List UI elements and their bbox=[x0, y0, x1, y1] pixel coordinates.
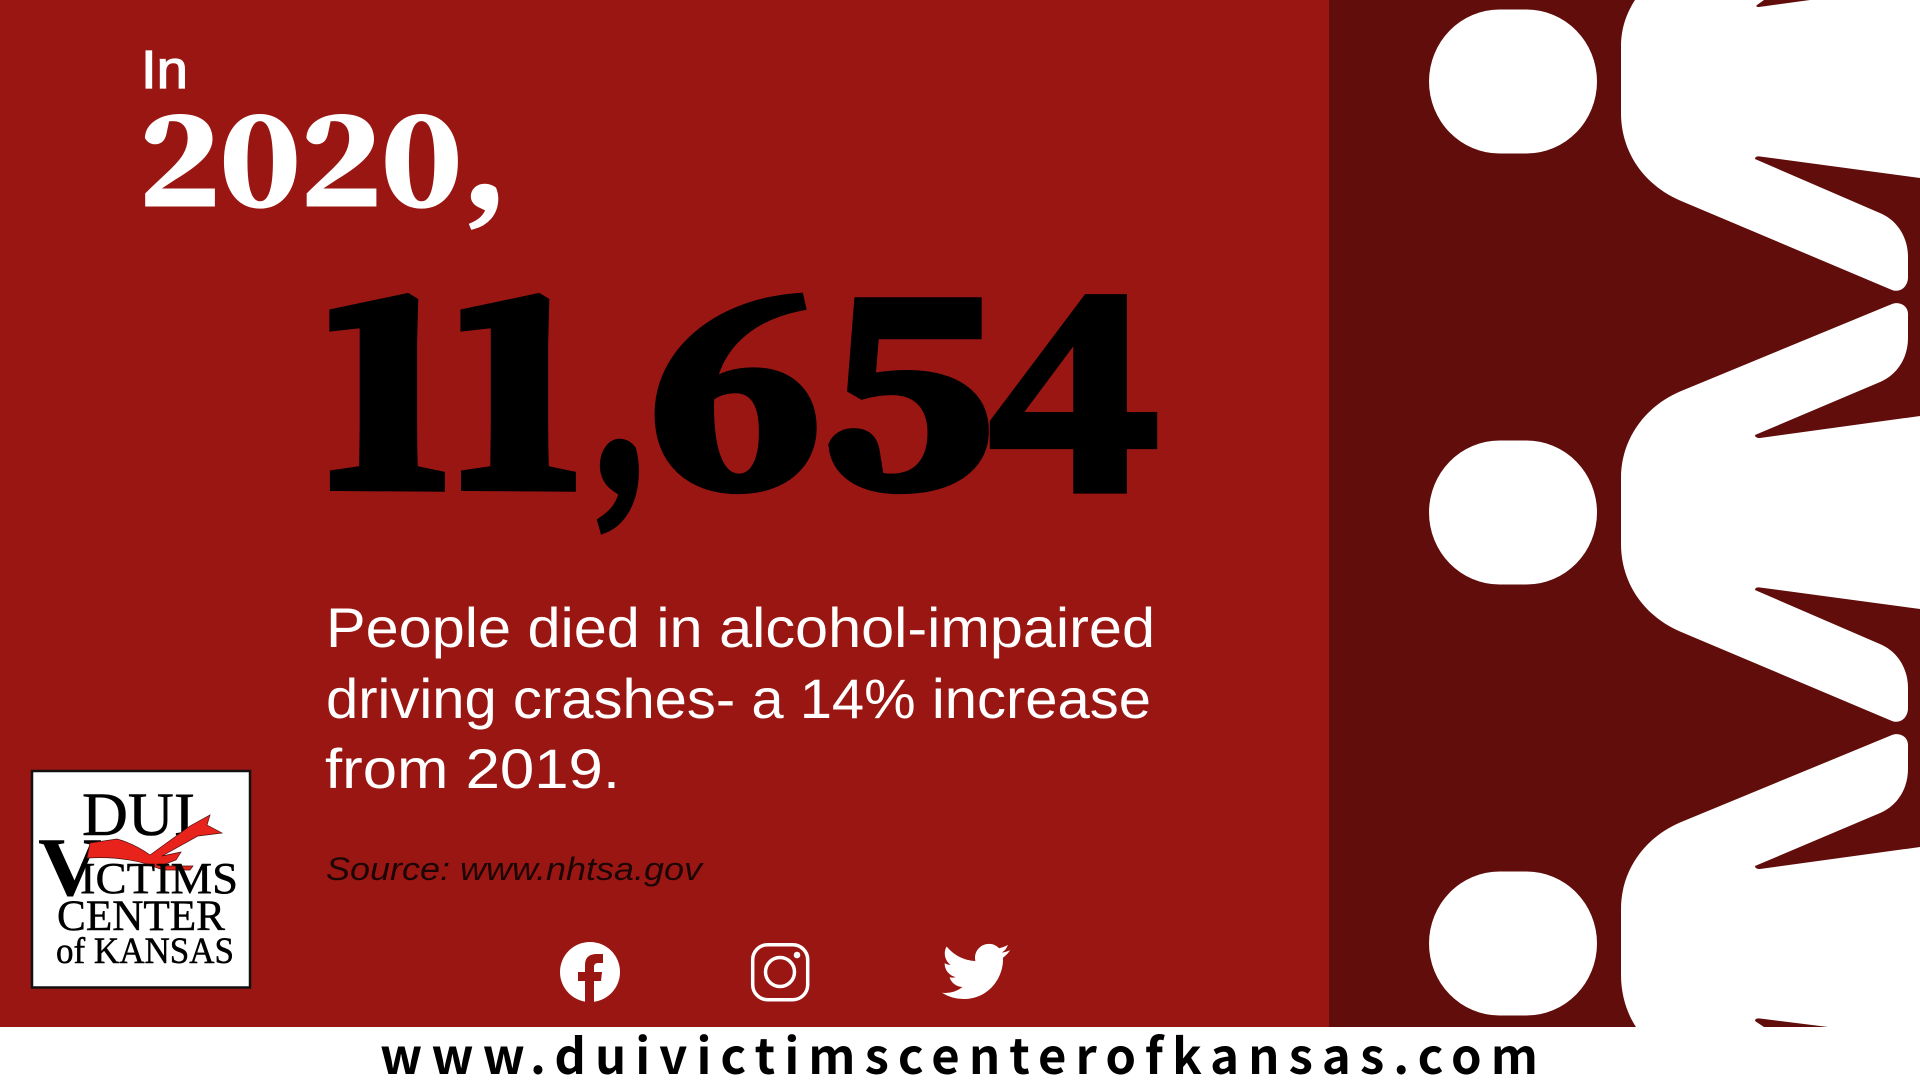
icon: twitter bbox=[942, 944, 1010, 999]
icon: person 3 bbox=[1429, 734, 1920, 1027]
logo: DUI Victims Center of Kansas: V bbox=[38, 821, 102, 914]
panel: red background bbox=[0, 0, 1330, 1027]
big number: 11,654 bbox=[325, 205, 1158, 554]
big number: 11,654: 11 bbox=[325, 206, 576, 554]
icon: facebook bbox=[560, 942, 620, 1003]
heading: year 2020: 2020, bbox=[139, 65, 507, 240]
logo: DUI Victims Center of Kansas: of KANSAS bbox=[56, 931, 234, 972]
icon: red ribbon bbox=[87, 815, 222, 870]
icon: person 2 bbox=[1429, 303, 1920, 722]
heading: In: In bbox=[141, 40, 188, 100]
text: source: Source: www.nhtsa.gov bbox=[326, 851, 704, 887]
icon: person 1 bbox=[1429, 0, 1920, 291]
big number: 11,654: 654 bbox=[650, 206, 1158, 554]
logo: DUI Victims Center of Kansas bbox=[32, 771, 250, 988]
logo: DUI Victims Center of Kansas: CENTER bbox=[57, 893, 225, 940]
big number: 11,654: , bbox=[590, 205, 649, 553]
text block: description: driving crashes- a 14% increase bbox=[326, 667, 1151, 730]
text block: description bbox=[325, 596, 1155, 800]
logo: DUI Victims Center of Kansas: ICTIMS bbox=[80, 854, 238, 903]
text block: description: from 2019. bbox=[325, 737, 620, 800]
text block: description: People died in alcohol-impaired bbox=[326, 596, 1155, 659]
logo: DUI Victims Center of Kansas: DUI bbox=[82, 782, 195, 849]
icon: instagram bbox=[753, 945, 808, 1000]
panel: dark red side panel with people bbox=[1329, 0, 1920, 1027]
